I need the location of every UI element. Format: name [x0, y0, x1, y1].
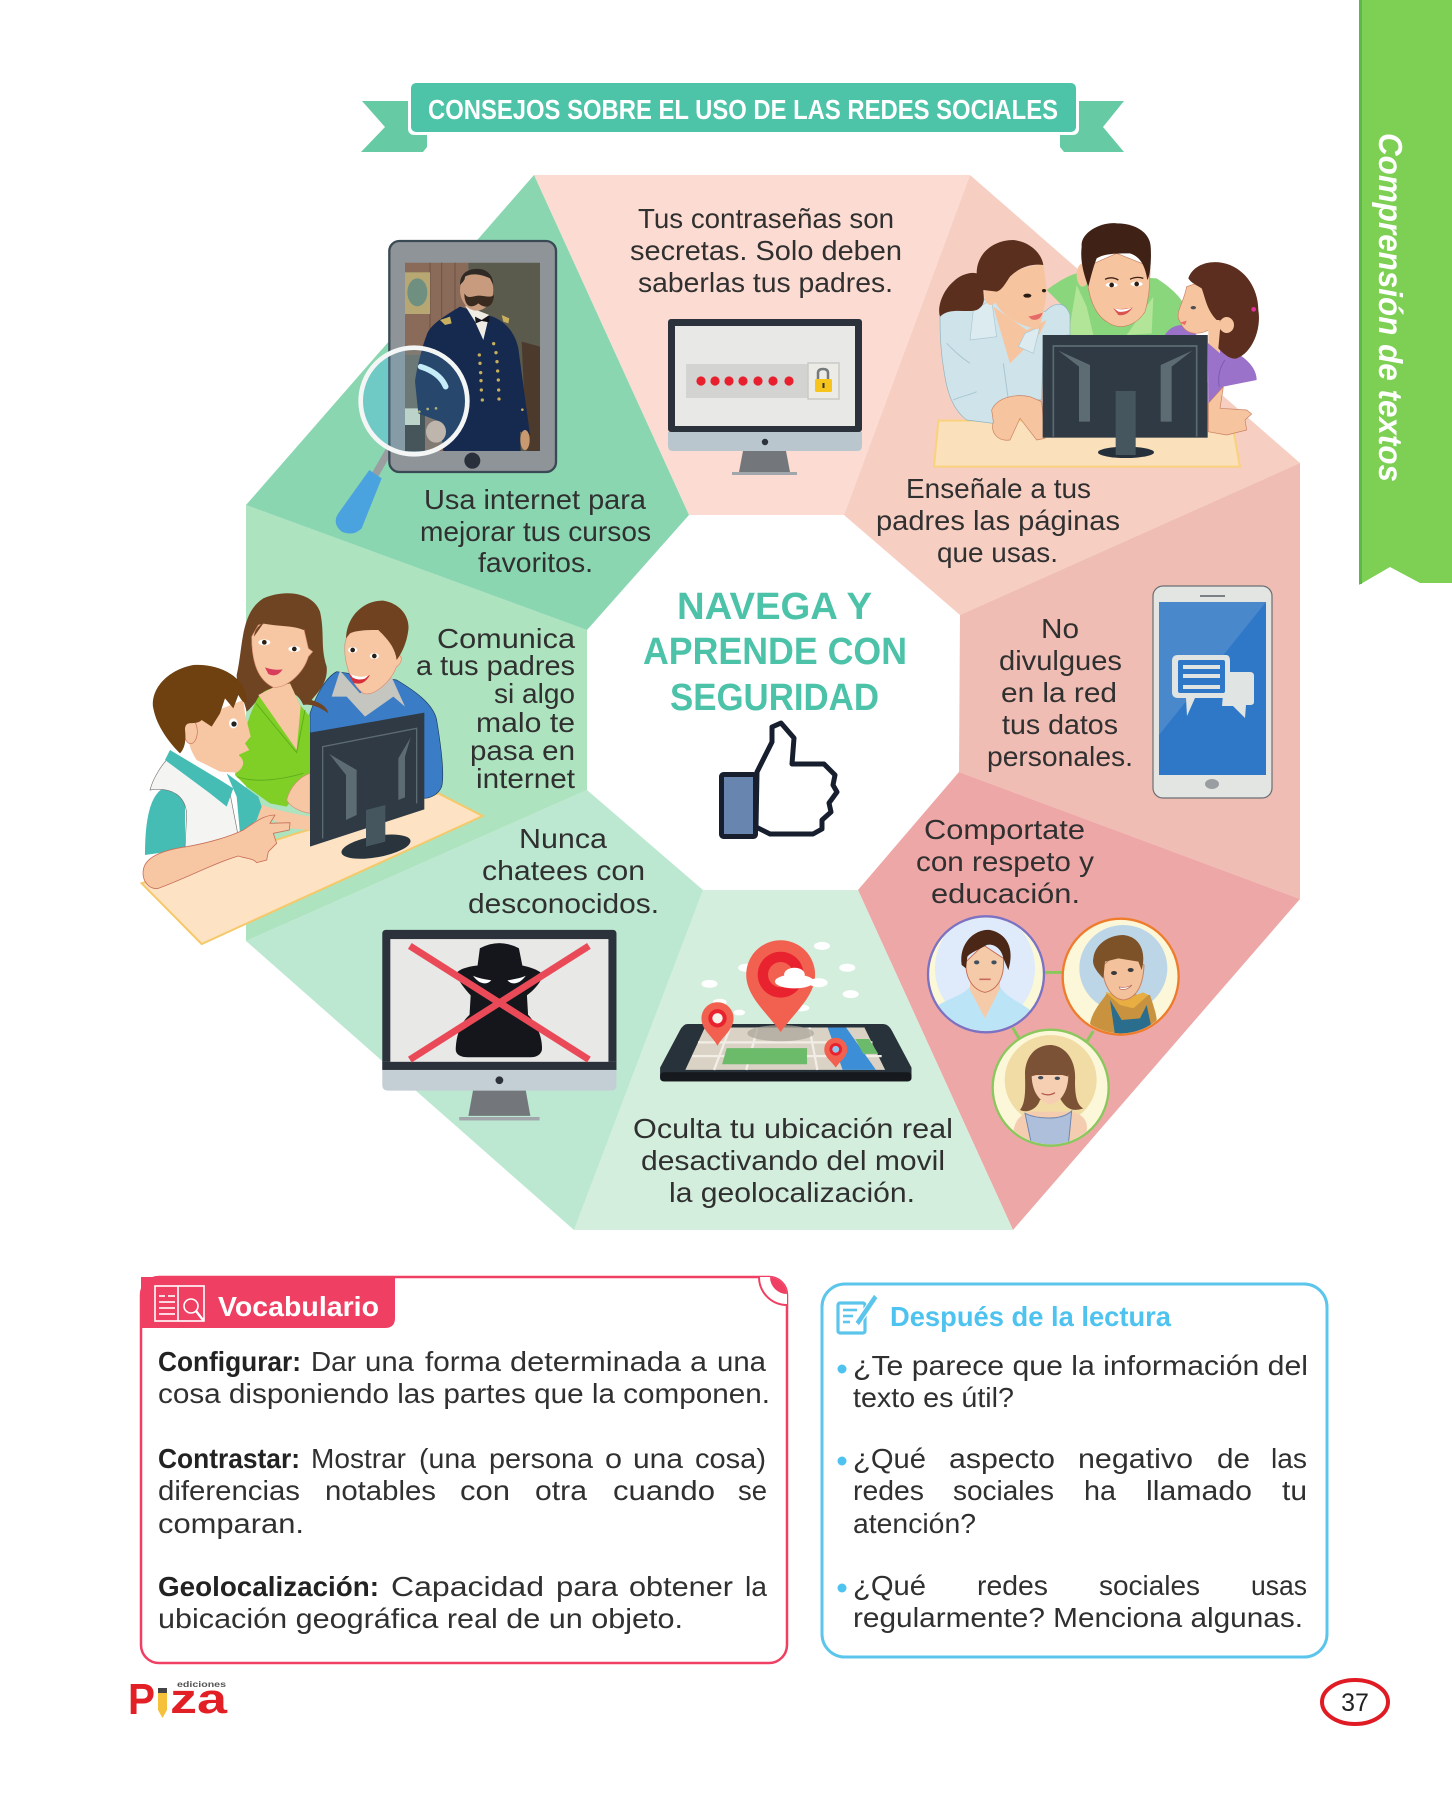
- question 2: redes: [853, 1475, 924, 1506]
- logo: ediciones Piza: [128, 1675, 228, 1724]
- text block: datos personales: divulgues: [999, 645, 1122, 676]
- text block: geolocalización: desactivando del movil: [641, 1145, 945, 1176]
- question 1: texto es útil?: [853, 1382, 1014, 1413]
- text block: datos personales: tus datos: [1002, 709, 1118, 740]
- text block: comunica: si algo: [494, 678, 575, 709]
- definition: geolocalización: la: [745, 1571, 768, 1602]
- question 3: sociales: [1099, 1570, 1200, 1601]
- text block: comunica: Comunica: [437, 623, 575, 654]
- page number: 37: [1341, 1689, 1369, 1717]
- definition: configurar: Configurar:: [158, 1346, 301, 1377]
- logo: ediciones Piza: P: [128, 1675, 155, 1724]
- definition: contrastar: Mostrar: [311, 1443, 406, 1474]
- definition: contrastar: Contrastar:: [158, 1443, 300, 1474]
- text block: usa internet: mejorar tus cursos: [420, 516, 651, 547]
- center heading: APRENDE CON: [643, 631, 907, 673]
- corner bookmark: [758, 1277, 787, 1306]
- icon: three linked child portraits: [928, 913, 1179, 1148]
- vocabulario heading tab: [141, 1277, 395, 1328]
- text block: usa internet: Usa internet para: [424, 484, 647, 515]
- definition: contrastar: una: [633, 1443, 684, 1474]
- definition: configurar: forma: [425, 1346, 502, 1377]
- page number: [1322, 1680, 1388, 1724]
- definition: contrastar: o: [605, 1443, 622, 1474]
- panel: vocabulario: [141, 1249, 815, 1663]
- title banner: CONSEJOS SOBRE EL USO DE LAS REDES SOCIALES: [428, 94, 1058, 125]
- text block: usa internet: [420, 484, 651, 578]
- text block: desconocidos: desconocidos.: [468, 888, 659, 919]
- text block: enseñale: Enseñale a tus: [906, 473, 1091, 504]
- icon: smartphone with chat bubbles: [1153, 586, 1272, 798]
- definition: geolocalización: ubicación geográfica real de un objeto.: [158, 1603, 683, 1634]
- definition: configurar: Dar: [311, 1346, 356, 1377]
- question 3: usas: [1251, 1570, 1307, 1601]
- center heading: SEGURIDAD: [670, 677, 879, 719]
- definition: contrastar: [158, 1443, 767, 1539]
- question 2: llamado: [1146, 1475, 1252, 1506]
- icon: monitor with password field: [668, 319, 862, 475]
- question 3: ¿Qué: [853, 1570, 926, 1601]
- panel: después de la lectura: [822, 1284, 1327, 1657]
- text block: respeto: [916, 814, 1094, 909]
- definition: geolocalización: Capacidad: [391, 1571, 544, 1602]
- text block: datos personales: personales.: [987, 741, 1133, 772]
- center heading: [643, 586, 907, 719]
- question 2: atención?: [853, 1508, 976, 1539]
- illustration: child with parents at a computer: [142, 593, 483, 944]
- vocabulario heading tab: Vocabulario: [218, 1291, 379, 1322]
- definition: contrastar: con: [460, 1475, 510, 1506]
- text block: desconocidos: chatees con: [482, 855, 645, 886]
- text block: enseñale: padres las páginas: [876, 505, 1120, 536]
- question 2: [838, 1443, 1307, 1539]
- definition: configurar: una: [365, 1346, 415, 1377]
- text block: geolocalización: Oculta tu ubicación real: [633, 1113, 953, 1144]
- question 2: ¿Qué: [853, 1443, 926, 1474]
- text block: geolocalización: [633, 1113, 953, 1208]
- definition: configurar: determinada: [510, 1346, 682, 1377]
- question 2: de: [1217, 1443, 1250, 1474]
- definition: contrastar: cosa): [695, 1443, 766, 1474]
- icon: monitor with crossed-out hacker: [382, 930, 616, 1120]
- icon: book and magnifier: [155, 1286, 204, 1321]
- question 1: ¿Te parece que la información del: [853, 1350, 1308, 1381]
- definition: geolocalización: [158, 1571, 768, 1634]
- text block: contraseñas: Tus contraseñas son: [638, 203, 894, 234]
- question 1: [838, 1350, 1308, 1413]
- definition: contrastar: cuando: [613, 1475, 715, 1506]
- question 2: aspecto: [949, 1443, 1055, 1474]
- question 2: las: [1271, 1443, 1307, 1474]
- question 3: [838, 1570, 1307, 1633]
- después heading: Después de la lectura: [890, 1301, 1171, 1332]
- question 3: redes: [977, 1570, 1048, 1601]
- text block: comunica: [416, 623, 575, 794]
- logo: ediciones Piza: za: [170, 1675, 228, 1722]
- definition: contrastar: comparan.: [158, 1508, 304, 1539]
- icon: tablet with portrait and magnifier: [336, 241, 556, 534]
- question 3: regularmente? Menciona algunas.: [853, 1602, 1303, 1633]
- text block: contraseñas: saberlas tus padres.: [638, 267, 893, 298]
- text block: comunica: internet: [476, 763, 575, 794]
- sidebar ribbon: Comprensión de textos: [1359, 0, 1452, 585]
- text block: datos personales: en la red: [1001, 677, 1117, 708]
- text block: datos personales: [987, 613, 1133, 772]
- definition: contrastar: notables: [325, 1475, 436, 1506]
- question 2: tu: [1282, 1475, 1307, 1506]
- octagon wheel of segments: [246, 175, 1300, 1230]
- text block: comunica: a tus padres: [416, 650, 575, 681]
- text block: usa internet: favoritos.: [478, 547, 593, 578]
- definition: configurar: [158, 1346, 770, 1409]
- definition: configurar: una: [717, 1346, 767, 1377]
- definition: contrastar: diferencias: [158, 1475, 300, 1506]
- text block: contraseñas: [630, 203, 902, 298]
- text block: desconocidos: Nunca: [519, 823, 608, 854]
- sidebar ribbon: Comprensión de textos: Comprensión de textos: [1372, 133, 1409, 482]
- text block: enseñale: que usas.: [937, 537, 1058, 568]
- definition: geolocalización: para: [556, 1571, 619, 1602]
- text block: respeto: educación.: [931, 878, 1080, 909]
- question 2: ha: [1084, 1475, 1117, 1506]
- logo: ediciones Piza: ediciones: [177, 1680, 227, 1689]
- text block: datos personales: No: [1041, 613, 1079, 644]
- definition: configurar: a: [690, 1346, 708, 1377]
- center heading: NAVEGA Y: [677, 586, 872, 628]
- icon: map on phone with location pins: [660, 940, 912, 1081]
- question 2: sociales: [953, 1475, 1054, 1506]
- text block: contraseñas: secretas. Solo deben: [630, 235, 902, 266]
- title banner: [361, 80, 1124, 152]
- definition: contrastar: se: [738, 1475, 767, 1506]
- definition: contrastar: persona: [489, 1443, 594, 1474]
- icon: thumbs up: [722, 723, 837, 836]
- text block: respeto: Comportate: [924, 814, 1085, 845]
- definition: contrastar: (una: [419, 1443, 477, 1474]
- text block: comunica: malo te: [476, 707, 575, 738]
- icon: note and pencil: [838, 1294, 878, 1333]
- text block: enseñale: [876, 473, 1120, 568]
- text block: respeto: con respeto y: [916, 846, 1094, 877]
- text block: desconocidos: [468, 823, 659, 919]
- text block: comunica: pasa en: [470, 735, 575, 766]
- text block: geolocalización: la geolocalización.: [669, 1177, 915, 1208]
- question 2: negativo: [1078, 1443, 1193, 1474]
- definition: configurar: cosa disponiendo las partes que la componen.: [158, 1378, 770, 1409]
- illustration: family around a computer: [934, 223, 1259, 467]
- definition: contrastar: otra: [535, 1475, 588, 1506]
- definition: geolocalización: Geolocalización:: [158, 1571, 379, 1602]
- definition: geolocalización: obtener: [629, 1571, 733, 1602]
